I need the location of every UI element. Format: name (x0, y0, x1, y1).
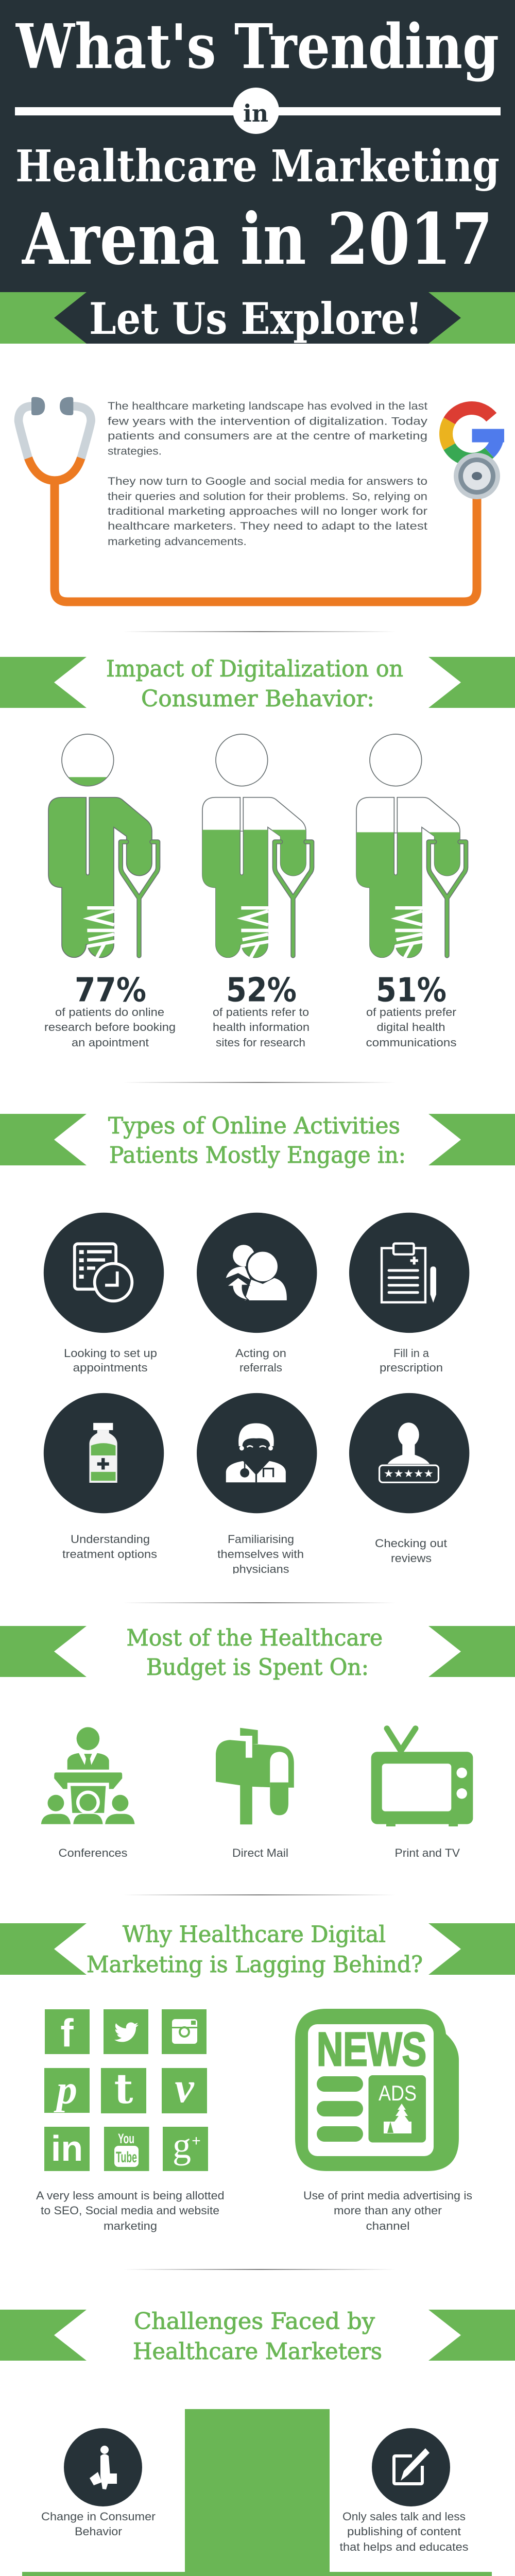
title divider with in badge (15, 88, 501, 134)
activity labels: prescription (380, 1361, 443, 1374)
budget labels: Conferences (59, 1846, 128, 1859)
panel: online activity icons (44, 1213, 469, 1513)
activity labels: Familiarising (228, 1533, 294, 1546)
lagging text: print media (303, 2189, 472, 2232)
activity labels: treatment options (62, 1548, 157, 1561)
icon: youtube: Tube (116, 2149, 137, 2166)
section heading: Healthcare Budget (0, 1625, 515, 1681)
intro text: They now turn to Google and social media for answers to (108, 476, 427, 487)
activity labels: Fill in a (393, 1347, 430, 1360)
icon: conference speaker (41, 1727, 134, 1824)
icon: google plus: + (192, 2132, 201, 2149)
intro text: patients and consumers are at the centre of marketing (108, 430, 427, 442)
lagging text: print media: channel (366, 2219, 410, 2232)
section heading: Why Digital Marketing is Lagging: Why Healthcare Digital (123, 1922, 386, 1947)
section heading: Impact of Digitalization: Impact of Digitalization on (106, 656, 403, 682)
intro text (108, 400, 428, 548)
activity labels: physicians (233, 1563, 289, 1575)
icon: google plus (163, 2125, 208, 2171)
activity labels: reviews (391, 1552, 432, 1565)
challenge: change in consumer behavior: Behavior (75, 2525, 122, 2538)
icon: tumblr: t (114, 2064, 133, 2113)
stat: 51 percent: of patients prefer (366, 1006, 456, 1019)
lagging text: social budget: A very less amount is being allotted (36, 2189, 225, 2202)
section heading: Healthcare Budget: Most of the Healthcare (127, 1625, 383, 1651)
stat: 52 percent: health information (213, 1021, 310, 1033)
lagging text: social budget: marketing (104, 2219, 157, 2232)
budget labels: Print and TV (394, 1846, 460, 1859)
activity labels (62, 1347, 447, 1575)
activity labels: themselves with (217, 1548, 304, 1561)
stat: 51 percent (366, 972, 456, 1049)
icon: stethoscope with Google chest piece (19, 397, 504, 602)
stat: 77 percent: an apointment (72, 1036, 149, 1049)
intro text: their queries and solution for their problems. So, relying on (108, 490, 427, 503)
banner: Let Us Explore: Let Us Explore! (89, 293, 422, 344)
section heading: Why Digital Marketing is Lagging (0, 1922, 515, 1978)
activity labels: Looking to set up (64, 1347, 157, 1360)
intro text: few years with the intervention of digitalization. Today (108, 415, 428, 428)
section heading: Challenges: Challenges Faced by (134, 2309, 375, 2335)
stat: 77 percent: 77% (75, 972, 146, 1010)
icon: mailbox (216, 1728, 294, 1824)
budget labels (59, 1846, 460, 1859)
icon: vimeo: v (175, 2064, 195, 2112)
stat: 77 percent: research before booking (44, 1021, 176, 1033)
challenge: sales talk: Only sales talk and less (342, 2510, 466, 2523)
section heading: Challenges: Healthcare Marketers (133, 2338, 382, 2365)
activity labels: Checking out (375, 1537, 447, 1550)
activity labels: Understanding (71, 1533, 150, 1546)
icon: pinterest: p (54, 2067, 77, 2113)
icon: newspaper with ads (295, 2009, 459, 2171)
challenge: change in consumer behavior (41, 2428, 156, 2538)
challenge: sales talk (340, 2428, 469, 2553)
chart: patient figure 77 percent (48, 734, 158, 958)
icon: referrals people with arrows (197, 1213, 317, 1333)
intro text: marketing advancements. (108, 536, 247, 548)
lagging text: social budget (36, 2189, 225, 2232)
section heading: Healthcare Budget: Budget is Spent On: (146, 1654, 369, 1681)
challenge: sales talk: publishing of content (347, 2525, 461, 2538)
activity labels: Acting on (235, 1347, 286, 1360)
icon: youtube: You (118, 2131, 134, 2146)
icon: newspaper with ads: NEWS (317, 2023, 426, 2076)
section heading: Types of Online Activities (0, 1113, 515, 1168)
activity labels: appointments (73, 1361, 148, 1374)
intro text: traditional marketing approaches will no longer work for (108, 505, 427, 517)
section heading: Impact of Digitalization: Consumer Behavior: (141, 686, 374, 712)
chart: patient figure 51 percent (356, 734, 466, 958)
icon: linkedin (44, 2127, 90, 2171)
stat: 52 percent: of patients refer to (213, 1006, 309, 1019)
icon: tumblr (101, 2064, 146, 2113)
intro text: The healthcare marketing landscape has evolved in the last (108, 400, 427, 412)
icon: youtube (104, 2127, 149, 2171)
icon: appointments calendar and clock (44, 1213, 164, 1333)
icon: vimeo (162, 2064, 207, 2113)
stat: 51 percent: communications (366, 1036, 456, 1049)
intro text: healthcare marketers. They need to adapt to the latest (108, 520, 427, 532)
medical cross (22, 2409, 492, 2576)
section heading: Challenges (0, 2309, 515, 2365)
chart: patient figure 52 percent (202, 734, 312, 958)
header panel (0, 0, 515, 344)
icon: medicine bottle (44, 1393, 164, 1513)
panel: budget icons (41, 1727, 473, 1826)
lagging text: print media: Use of print media advertising is (303, 2189, 472, 2202)
icon: person with five star review: ★★★★★ (384, 1467, 434, 1480)
budget labels: Direct Mail (232, 1846, 288, 1859)
stat: 77 percent (44, 972, 176, 1049)
icon: pinterest (44, 2067, 90, 2113)
section heading: Why Digital Marketing is Lagging: Marketing is Lagging Behind? (87, 1952, 423, 1978)
stat: 51 percent: digital health (377, 1021, 445, 1033)
stat: 52 percent: sites for research (216, 1036, 305, 1049)
lagging text: social budget: to SEO, Social media and website (41, 2204, 219, 2217)
section heading: Types of Online Activities: Types of Online Activities (108, 1113, 400, 1139)
icon: television (371, 1728, 473, 1826)
challenge: change in consumer behavior: Change in Consumer (41, 2510, 156, 2523)
intro text: strategies. (108, 445, 162, 457)
stat: 52 percent: 52% (226, 972, 297, 1010)
icon grid: social media (44, 2009, 208, 2171)
stat: 51 percent: 51% (376, 972, 447, 1010)
icon: facebook (45, 2009, 90, 2055)
lagging text: print media: more than any other (334, 2204, 442, 2217)
icon: prescription clipboard (349, 1213, 469, 1333)
title divider with in badge: in (243, 99, 268, 127)
icon: linkedin: in (51, 2128, 83, 2168)
icon: facebook: f (60, 2011, 74, 2055)
icon: instagram (162, 2009, 207, 2054)
stat: 52 percent (213, 972, 310, 1049)
icon: person with five star review (349, 1393, 469, 1513)
icon: newspaper with ads: ADS (379, 2081, 417, 2105)
section heading: Types of Online Activities: Patients Mostly Engage in: (109, 1142, 406, 1168)
icon: twitter (104, 2009, 148, 2054)
challenge: sales talk: that helps and educates (340, 2540, 469, 2553)
activity labels: referrals (239, 1361, 282, 1374)
icon: google plus: g (173, 2125, 191, 2166)
icon: physician (197, 1393, 317, 1513)
stat: 77 percent: of patients do online (55, 1006, 164, 1019)
section heading: Impact of Digitalization (0, 656, 515, 712)
